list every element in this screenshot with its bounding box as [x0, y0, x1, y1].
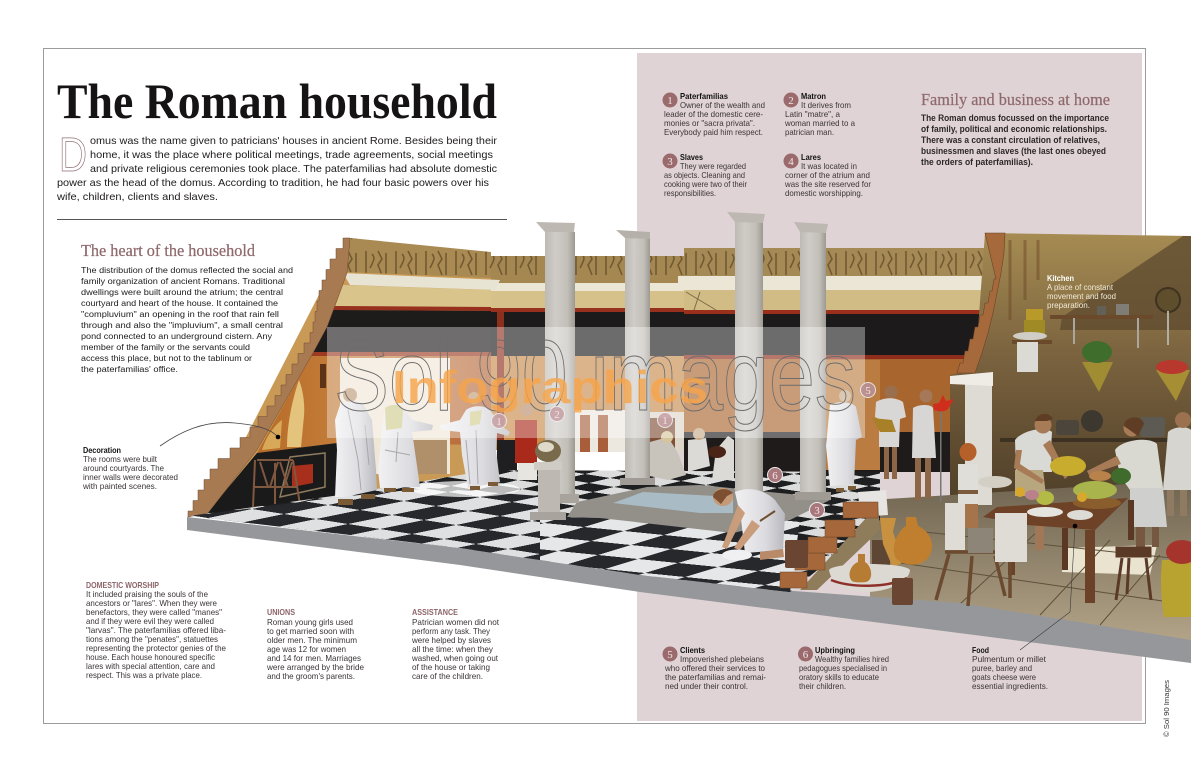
woman scrubbing the floor [713, 488, 785, 560]
legend item 5: clients: Impoverished plebeians [680, 655, 764, 664]
brick edge of left wall [188, 238, 350, 517]
togated man at right [826, 390, 862, 492]
legend item 6: upbringing [798, 646, 889, 691]
text block: domestic worship [86, 581, 226, 680]
legend item 6: upbringing: Wealthy families hired [815, 655, 889, 664]
text block: family and business at home: There was a constant circulation of relatives, [921, 135, 1100, 145]
legend item 2: matron: patrician man. [785, 128, 834, 137]
legend item 2: matron: Latin "matre", a [785, 110, 840, 119]
text block: assistance: care of the children. [412, 672, 483, 681]
wooden bucket [785, 540, 808, 568]
callout: kitchen: A place of constant [1047, 283, 1114, 292]
intro text block: omus was the name given to patricians' houses in ancient Rome. Besides being their [90, 136, 498, 147]
back wall [491, 256, 685, 452]
text block: family and business at home: of family, political and economic relationships. [921, 124, 1107, 134]
legend item 4: lares: It was located in [801, 162, 857, 171]
callout: decoration: around courtyards. The [83, 464, 164, 473]
callout: food: puree, barley and [972, 664, 1032, 673]
brick steps [780, 502, 880, 590]
legend item 4: lares: domestic worshipping. [785, 189, 863, 198]
callout: kitchen: movement and food [1047, 292, 1116, 301]
text block: domestic worship: ancestors or "lares". When they were [86, 599, 217, 608]
hanging herb basket [1082, 341, 1113, 392]
legend item 5: clients: who offered their services to [664, 664, 765, 673]
text block: unions: were arranged by the bride [266, 663, 364, 672]
text block: unions: UNIONS [267, 608, 295, 617]
person in red [515, 404, 537, 480]
number markers on the scene: 1 [662, 415, 668, 427]
heading: family and business at home: Family and business at home [921, 90, 1110, 109]
callout: decoration: Decoration [83, 446, 121, 455]
title: The Roman household [57, 73, 497, 129]
text block: the heart of the household: access this place, but not to the tablinum or [81, 353, 252, 363]
text block: assistance: ASSISTANCE [412, 608, 458, 617]
text block: unions: Roman young girls used [267, 618, 353, 627]
text block: domestic worship: DOMESTIC WORSHIP [86, 581, 159, 590]
legend item 3: slaves: responsibilities. [664, 189, 716, 198]
legend item 1: paterfamilias: leader of the domestic cere- [664, 110, 763, 119]
copyright credit: © Sol 90 Images [1162, 680, 1171, 737]
column 3 [727, 212, 765, 494]
text block: unions: and 14 for men. Marriages [267, 654, 361, 663]
clay jars [872, 517, 932, 568]
callout: decoration: The rooms were built [83, 455, 158, 464]
legend item 1: paterfamilias [662, 92, 765, 137]
text block: domestic worship: It included praising the souls of the [86, 590, 208, 599]
man 1 [335, 388, 377, 505]
legend item 2: matron [784, 92, 855, 137]
text block: the heart of the household: family organization of ancient Romans. Traditional [81, 276, 285, 286]
number markers on the scene: 1 [496, 416, 502, 428]
text block: domestic worship: and if they were evil they were called [86, 617, 214, 626]
text block: family and business at home [921, 113, 1109, 167]
callout: food: Pulmentum or millet [972, 655, 1047, 664]
text block: the heart of the household: pond connected to an underground cistern. Any [81, 331, 273, 341]
text block: the heart of the household: The distribution of the domus reflected the social and [81, 265, 293, 275]
heading: the heart of the household: The heart of the household [81, 241, 255, 260]
text block: assistance: of the house or taking [412, 663, 490, 672]
column 2 [616, 230, 655, 485]
man preparing food, left [1014, 414, 1068, 550]
kitchen wall [950, 233, 1191, 520]
legend item 1: paterfamilias: Everybody paid him respect. [664, 128, 763, 137]
legend item 3: slaves: They were regarded [680, 162, 746, 171]
callout: decoration: with painted scenes. [82, 482, 157, 491]
text block: the heart of the household: dwellings were built around the atrium; the central [81, 287, 283, 297]
wooden stool [1116, 548, 1151, 600]
legend item 3: slaves [662, 153, 747, 198]
servant with torch [912, 390, 954, 502]
text block: family and business at home: businessmen and slaves (the last ones obeyed [921, 146, 1106, 156]
text block: assistance: perform any task. They [412, 627, 491, 636]
callout: kitchen: Kitchen [1047, 274, 1074, 283]
text block: domestic worship: tions among the "penates", statuettes [86, 635, 218, 644]
text block: the heart of the household [81, 265, 293, 374]
man at far right [1163, 412, 1191, 516]
legend item 1: paterfamilias: 1 [667, 95, 673, 107]
kitchen pots [1056, 410, 1165, 437]
intro text block: power as the head of the domus. According to tradition, he had four basic powers over his [57, 178, 489, 189]
callout: food [972, 524, 1077, 691]
text block: domestic worship: house. Each house honoured specific [86, 653, 215, 662]
legend item 4: lares [784, 153, 871, 198]
legend item 6: upbringing: Upbringing [815, 646, 855, 655]
text block: unions [266, 608, 364, 681]
watermark: Infographics: Infographics [392, 361, 708, 413]
text block: the heart of the household: member of the family or the servants could [81, 342, 250, 352]
text block: family and business at home: The Roman domus focussed on the importance [921, 113, 1109, 123]
text block: the heart of the household: through and also the "impluvium", a small central [81, 320, 283, 330]
text block: the heart of the household: the paterfamilias' office. [81, 364, 178, 374]
intro text block: wife, children, clients and slaves. [56, 192, 218, 203]
legend item 6: upbringing: pedagogues specialised in [799, 664, 887, 673]
legend item 5: clients: the paterfamilias and remai- [665, 673, 766, 682]
intro text block [56, 129, 498, 203]
man 2 [378, 405, 433, 492]
callout: food: essential ingredients. [972, 682, 1048, 691]
man 3 [440, 392, 510, 490]
checkerboard floor [190, 470, 880, 592]
wooden bucket 2 [892, 578, 913, 605]
callout: kitchen [1047, 274, 1116, 310]
panel: pink background [637, 53, 1142, 721]
text block: domestic worship: lares with special attention, care and [86, 662, 215, 671]
white pillar [950, 372, 993, 505]
text block: the heart of the household: courtyard and heart of the house. It contained the [81, 298, 278, 308]
left wall [207, 238, 517, 513]
text block: assistance: all the time: when they [412, 645, 494, 654]
text block: domestic worship: respect. This was a private place. [86, 671, 202, 680]
callout: kitchen: preparation. [1047, 301, 1090, 310]
legend item 6: upbringing: 6 [803, 649, 809, 661]
legend item 5: clients: 5 [667, 649, 673, 661]
kitchen shelf with pots and cheese [1012, 288, 1180, 372]
legend item 3: slaves: 3 [667, 156, 673, 168]
brick edge of kitchen wall [957, 233, 1005, 373]
legend item 5: clients: ned under their control. [665, 682, 748, 691]
text block: the heart of the household: "compluvium" an opening in the roof that rain fell [81, 309, 279, 319]
watermark band [327, 327, 865, 438]
boy with plate [958, 443, 1012, 528]
servant carrying goods [872, 386, 906, 479]
legend item 1: paterfamilias: monies or "sacra privata". [664, 119, 755, 128]
legend item 4: lares: was the site reserved for [784, 180, 871, 189]
text block: unions: and the groom's parents. [267, 672, 355, 681]
text block: unions: older men. The minimum [267, 636, 357, 645]
number markers on the scene [492, 382, 876, 518]
legend item 4: lares: corner of the atrium and [785, 171, 870, 180]
white bowl and jug [829, 554, 910, 592]
legend item 3: slaves: Slaves [680, 153, 703, 162]
legend item 4: lares: Lares [801, 153, 821, 162]
legend item 4: lares: 4 [788, 156, 794, 168]
number markers on the scene: 5 [865, 385, 871, 397]
number markers on the scene: 3 [814, 505, 820, 517]
stool with pot and cloths [936, 503, 1027, 606]
legend item 2: matron: 2 [788, 95, 794, 107]
man preparing food, right [1087, 417, 1167, 557]
callout: food: Food [972, 646, 989, 655]
pedestal with urn [530, 440, 566, 520]
legend item 6: upbringing: oratory skills to educate [799, 673, 879, 682]
column 1 [536, 222, 579, 503]
legend item 2: matron: It derives from [801, 101, 851, 110]
text block: assistance [411, 608, 500, 681]
text block: unions: age was 12 for women [267, 645, 346, 654]
legend item 2: matron: Matron [801, 92, 826, 101]
intro text block: and private religious ceremonies took place. The paterfamilias had absolute domestic [90, 164, 497, 175]
text block: assistance: Patrician women did not [412, 618, 500, 627]
callout: food: goats cheese were [972, 673, 1036, 682]
hanging fruit basket [1156, 360, 1190, 401]
sack of fruit [1161, 540, 1191, 617]
text block: domestic worship: benefactors, they were called "manes" [86, 608, 222, 617]
legend item 5: clients: Clients [680, 646, 705, 655]
legend item 3: slaves: as objects. Cleaning and [664, 171, 745, 180]
illustration: cutaway of the domus [187, 212, 1191, 663]
text block: domestic worship: "larvas". The paterfamilias offered liba- [86, 626, 226, 635]
column 4 [794, 222, 831, 500]
seated children and pedagogue [650, 428, 734, 480]
stone floor edge [187, 517, 1191, 663]
legend item 2: matron: woman married to a [784, 119, 855, 128]
intro text block: D [59, 129, 87, 182]
right wall [678, 248, 989, 472]
legend item 1: paterfamilias: Owner of the wealth and [680, 101, 765, 110]
text block: domestic worship: representing the protector genies of the [86, 644, 226, 653]
intro text block: home, it was the place where political meetings, trade agreements, social meetings [90, 150, 493, 161]
text block: unions: to get married soon with [267, 627, 354, 636]
legend item 6: upbringing: their children. [799, 682, 846, 691]
number markers on the scene: 6 [772, 470, 778, 482]
legend item 1: paterfamilias: Paterfamilias [680, 92, 728, 101]
kitchen floor [870, 480, 1191, 642]
callout: decoration [82, 423, 280, 491]
watermark: Sol 90 images: Sol 90 images [334, 320, 856, 432]
legend item 5: clients [662, 646, 766, 691]
text block: assistance: were helped by slaves [411, 636, 491, 645]
text block: family and business at home: the orders of paterfamilias). [921, 157, 1033, 167]
impluvium pool [567, 485, 830, 533]
number markers on the scene: 2 [554, 409, 560, 421]
white block [858, 490, 888, 517]
group of togated men [335, 388, 537, 505]
text block: assistance: washed, when going out [411, 654, 499, 663]
legend item 3: slaves: cooking were two of their [664, 180, 747, 189]
kitchen table with food [983, 456, 1134, 603]
callout: decoration: inner walls were decorated [83, 473, 178, 482]
